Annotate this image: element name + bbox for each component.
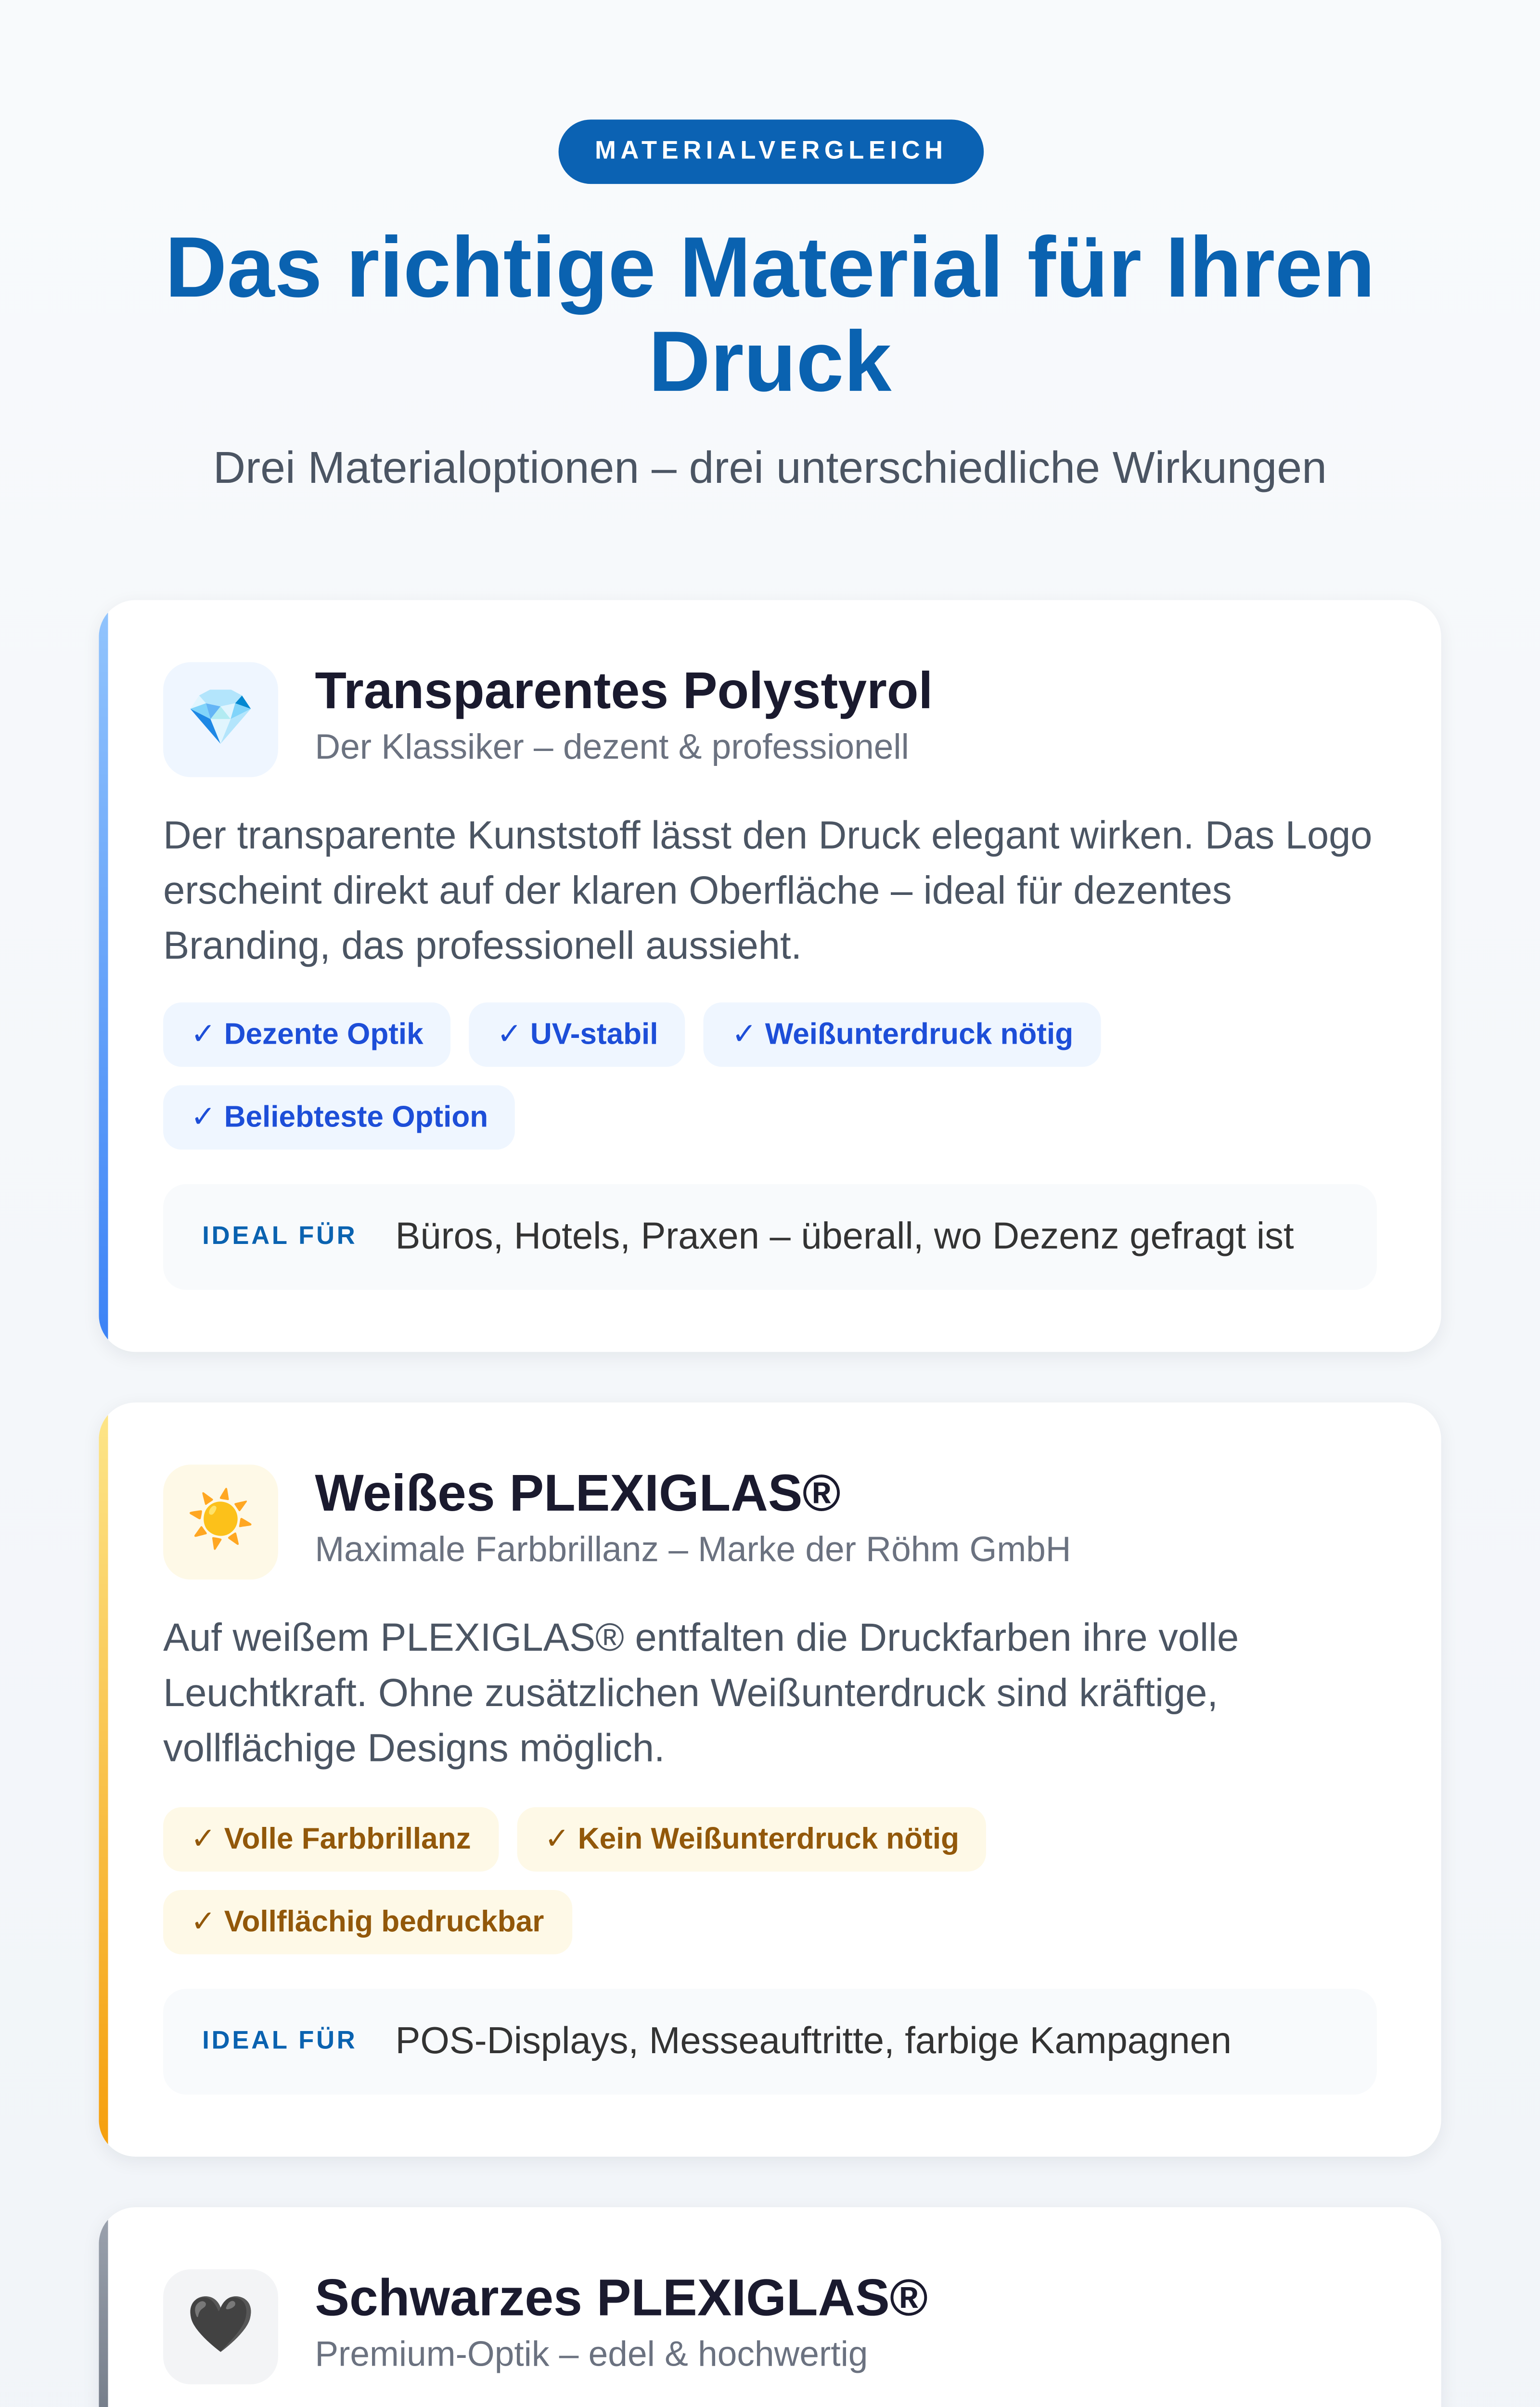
tags: ✓ Volle Farbbrillanz — [191, 1821, 471, 1855]
ideal for: IDEAL FÜR — [202, 1223, 358, 1251]
panel: schwarzes PLEXIGLAS — [99, 2207, 1441, 2407]
heading: Transparentes Polystyrol — [315, 662, 933, 720]
panel: weißes PLEXIGLAS — [99, 1402, 1441, 2157]
ideal for: Büros, Hotels, Praxen – überall, wo Dezenz gefragt ist — [395, 1216, 1294, 1258]
tags: ✓ UV-stabil — [497, 1016, 658, 1051]
icon: diamond — [163, 662, 278, 777]
panel: transparentes Polystyrol — [99, 600, 1441, 1352]
tags: ✓ Dezente Optik — [191, 1016, 424, 1051]
description: erscheint direkt auf der klaren Oberfläche – ideal für dezentes — [163, 869, 1232, 913]
subheading: Maximale Farbbrillanz – Marke der Röhm GmbH — [315, 1531, 1071, 1570]
title — [165, 219, 1375, 409]
subtitle: Drei Materialoptionen – drei unterschiedliche Wirkungen — [213, 444, 1327, 494]
description: Leuchtkraft. Ohne zusätzlichen Weißunterdruck sind kräftige, — [163, 1671, 1218, 1715]
tags: ✓ Vollflächig bedruckbar — [191, 1904, 544, 1938]
description: vollflächige Designs möglich. — [163, 1727, 665, 1771]
tags: ✓ Beliebteste Option — [191, 1099, 488, 1134]
heading: Schwarzes PLEXIGLAS® — [315, 2269, 928, 2327]
icon: sun — [163, 1464, 278, 1579]
tags: ✓ Weißunterdruck nötig — [732, 1016, 1073, 1051]
title: Das richtige Material für Ihren — [165, 219, 1375, 315]
heading: Weißes PLEXIGLAS® — [315, 1464, 841, 1522]
tags: ✓ Kein Weißunterdruck nötig — [544, 1821, 959, 1855]
icon: sun: ☀️ — [186, 1490, 255, 1552]
badge — [559, 119, 984, 184]
tags — [163, 1002, 1101, 1150]
title: Druck — [649, 313, 891, 409]
tags — [163, 1807, 986, 1954]
ideal for — [163, 1184, 1377, 1290]
description — [163, 814, 1372, 968]
icon: black heart: 🖤 — [186, 2295, 255, 2357]
ideal for: IDEAL FÜR — [202, 2028, 358, 2056]
badge: MATERIALVERGLEICH — [595, 138, 948, 166]
description — [163, 1617, 1239, 1771]
description: Branding, das professionell aussieht. — [163, 924, 802, 968]
ideal for: POS-Displays, Messeauftritte, farbige Kampagnen — [395, 2021, 1232, 2062]
ideal for — [163, 1989, 1377, 2095]
description: Auf weißem PLEXIGLAS® entfalten die Druckfarben ihre volle — [163, 1617, 1239, 1660]
icon: black heart — [163, 2269, 278, 2384]
description: Der transparente Kunststoff lässt den Druck elegant wirken. Das Logo — [163, 814, 1372, 857]
icon: diamond: 💎 — [186, 687, 255, 750]
subheading: Premium-Optik – edel & hochwertig — [315, 2336, 868, 2375]
subheading: Der Klassiker – dezent & professionell — [315, 729, 909, 768]
